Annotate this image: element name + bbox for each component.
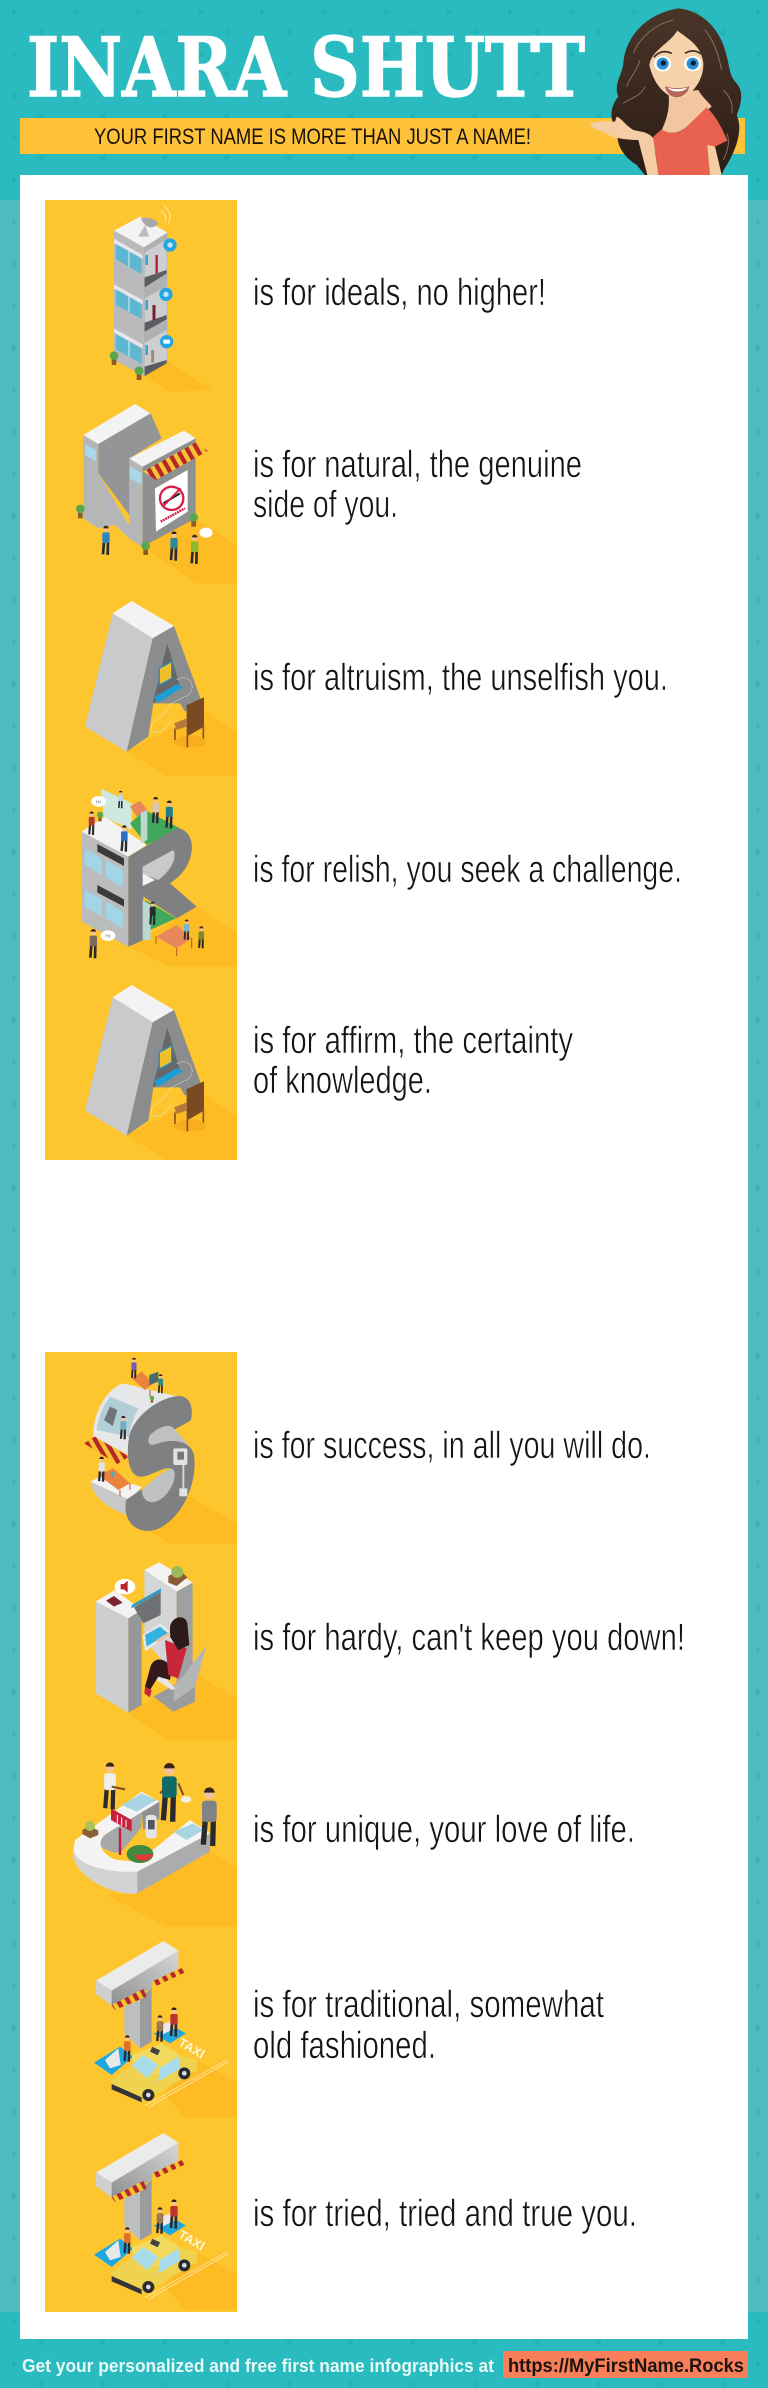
icon: letter T taxi stand (94, 1941, 237, 2117)
footer link badge: https://MyFirstName.Rocks (508, 2356, 744, 2377)
icon: second letter A building (85, 985, 237, 1160)
text: N (253, 444, 582, 526)
text: second T: is for tried, tried and true you. (253, 2193, 637, 2235)
icon: letter H building with woman at desk (96, 1562, 237, 1740)
icon: letter A building with chair (85, 601, 237, 776)
subtitle banner (20, 118, 745, 154)
icon: letter R building (82, 788, 237, 967)
text: T (253, 1984, 604, 2067)
text: S: is for success, in all you will do. (253, 1425, 651, 1467)
yellow tile column: first name (45, 200, 237, 1160)
subtitle banner: YOUR FIRST NAME IS MORE THAN JUST A NAME! (94, 124, 531, 149)
footer text: Get your personalized and free first name infographics at (22, 2356, 494, 2376)
icon: letter U counter (73, 1762, 237, 1927)
text: N: is for natural, the genuine (253, 444, 582, 486)
text: N: side of you. (253, 484, 398, 526)
icon: letter I building (110, 205, 213, 392)
text: T: old fashioned. (253, 2025, 436, 2067)
title: INARA SHUTT (27, 21, 585, 116)
yellow tile column: last name (45, 1352, 237, 2312)
text: second A: of knowledge. (253, 1060, 432, 1102)
icon: letter R building: HI (105, 934, 110, 939)
text: I: is for ideals, no higher! (253, 272, 546, 314)
text: second A: is for affirm, the certainty (253, 1020, 573, 1062)
icon: second letter T taxi stand (94, 2133, 237, 2309)
character: woman presenting (590, 8, 741, 175)
icon: letter N building (76, 404, 237, 583)
text: second A (253, 1020, 573, 1102)
text: U: is for unique, your love of life. (253, 1809, 635, 1851)
icon: letter S building (84, 1358, 237, 1544)
text: T: is for traditional, somewhat (253, 1984, 604, 2026)
icon: letter R building: HI (96, 799, 101, 804)
